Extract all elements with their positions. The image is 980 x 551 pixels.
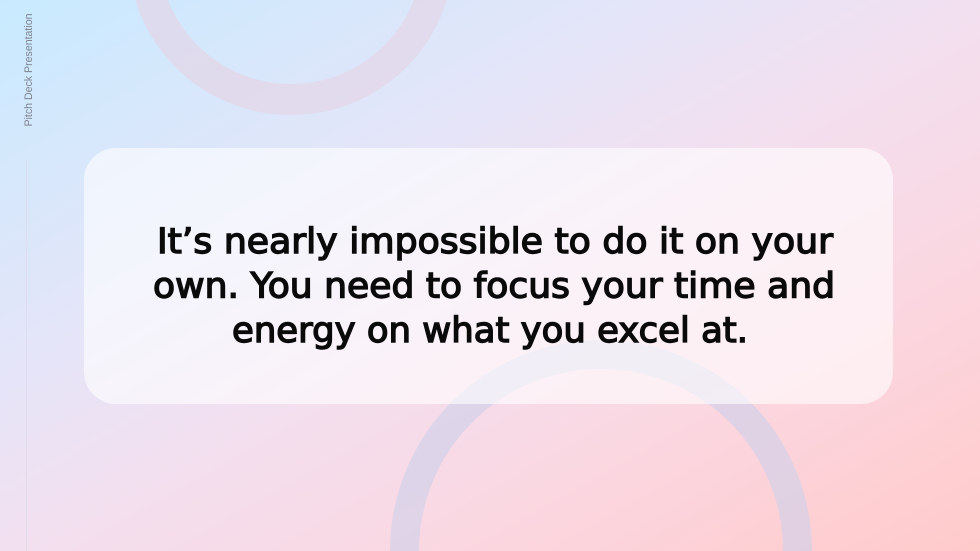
decorative ring: bottom (390, 340, 812, 551)
vertical side line (26, 160, 27, 551)
quote line 1: It’s nearly impossible to do it on your (157, 222, 834, 262)
quote panel (84, 148, 893, 404)
quote text (153, 222, 835, 351)
side label: Pitch Deck Presentation (23, 13, 35, 126)
decorative ring: top (135, 0, 447, 115)
quote line 2: own. You need to focus your time and (153, 266, 835, 306)
quote line 3: energy on what you excel at. (232, 311, 748, 351)
